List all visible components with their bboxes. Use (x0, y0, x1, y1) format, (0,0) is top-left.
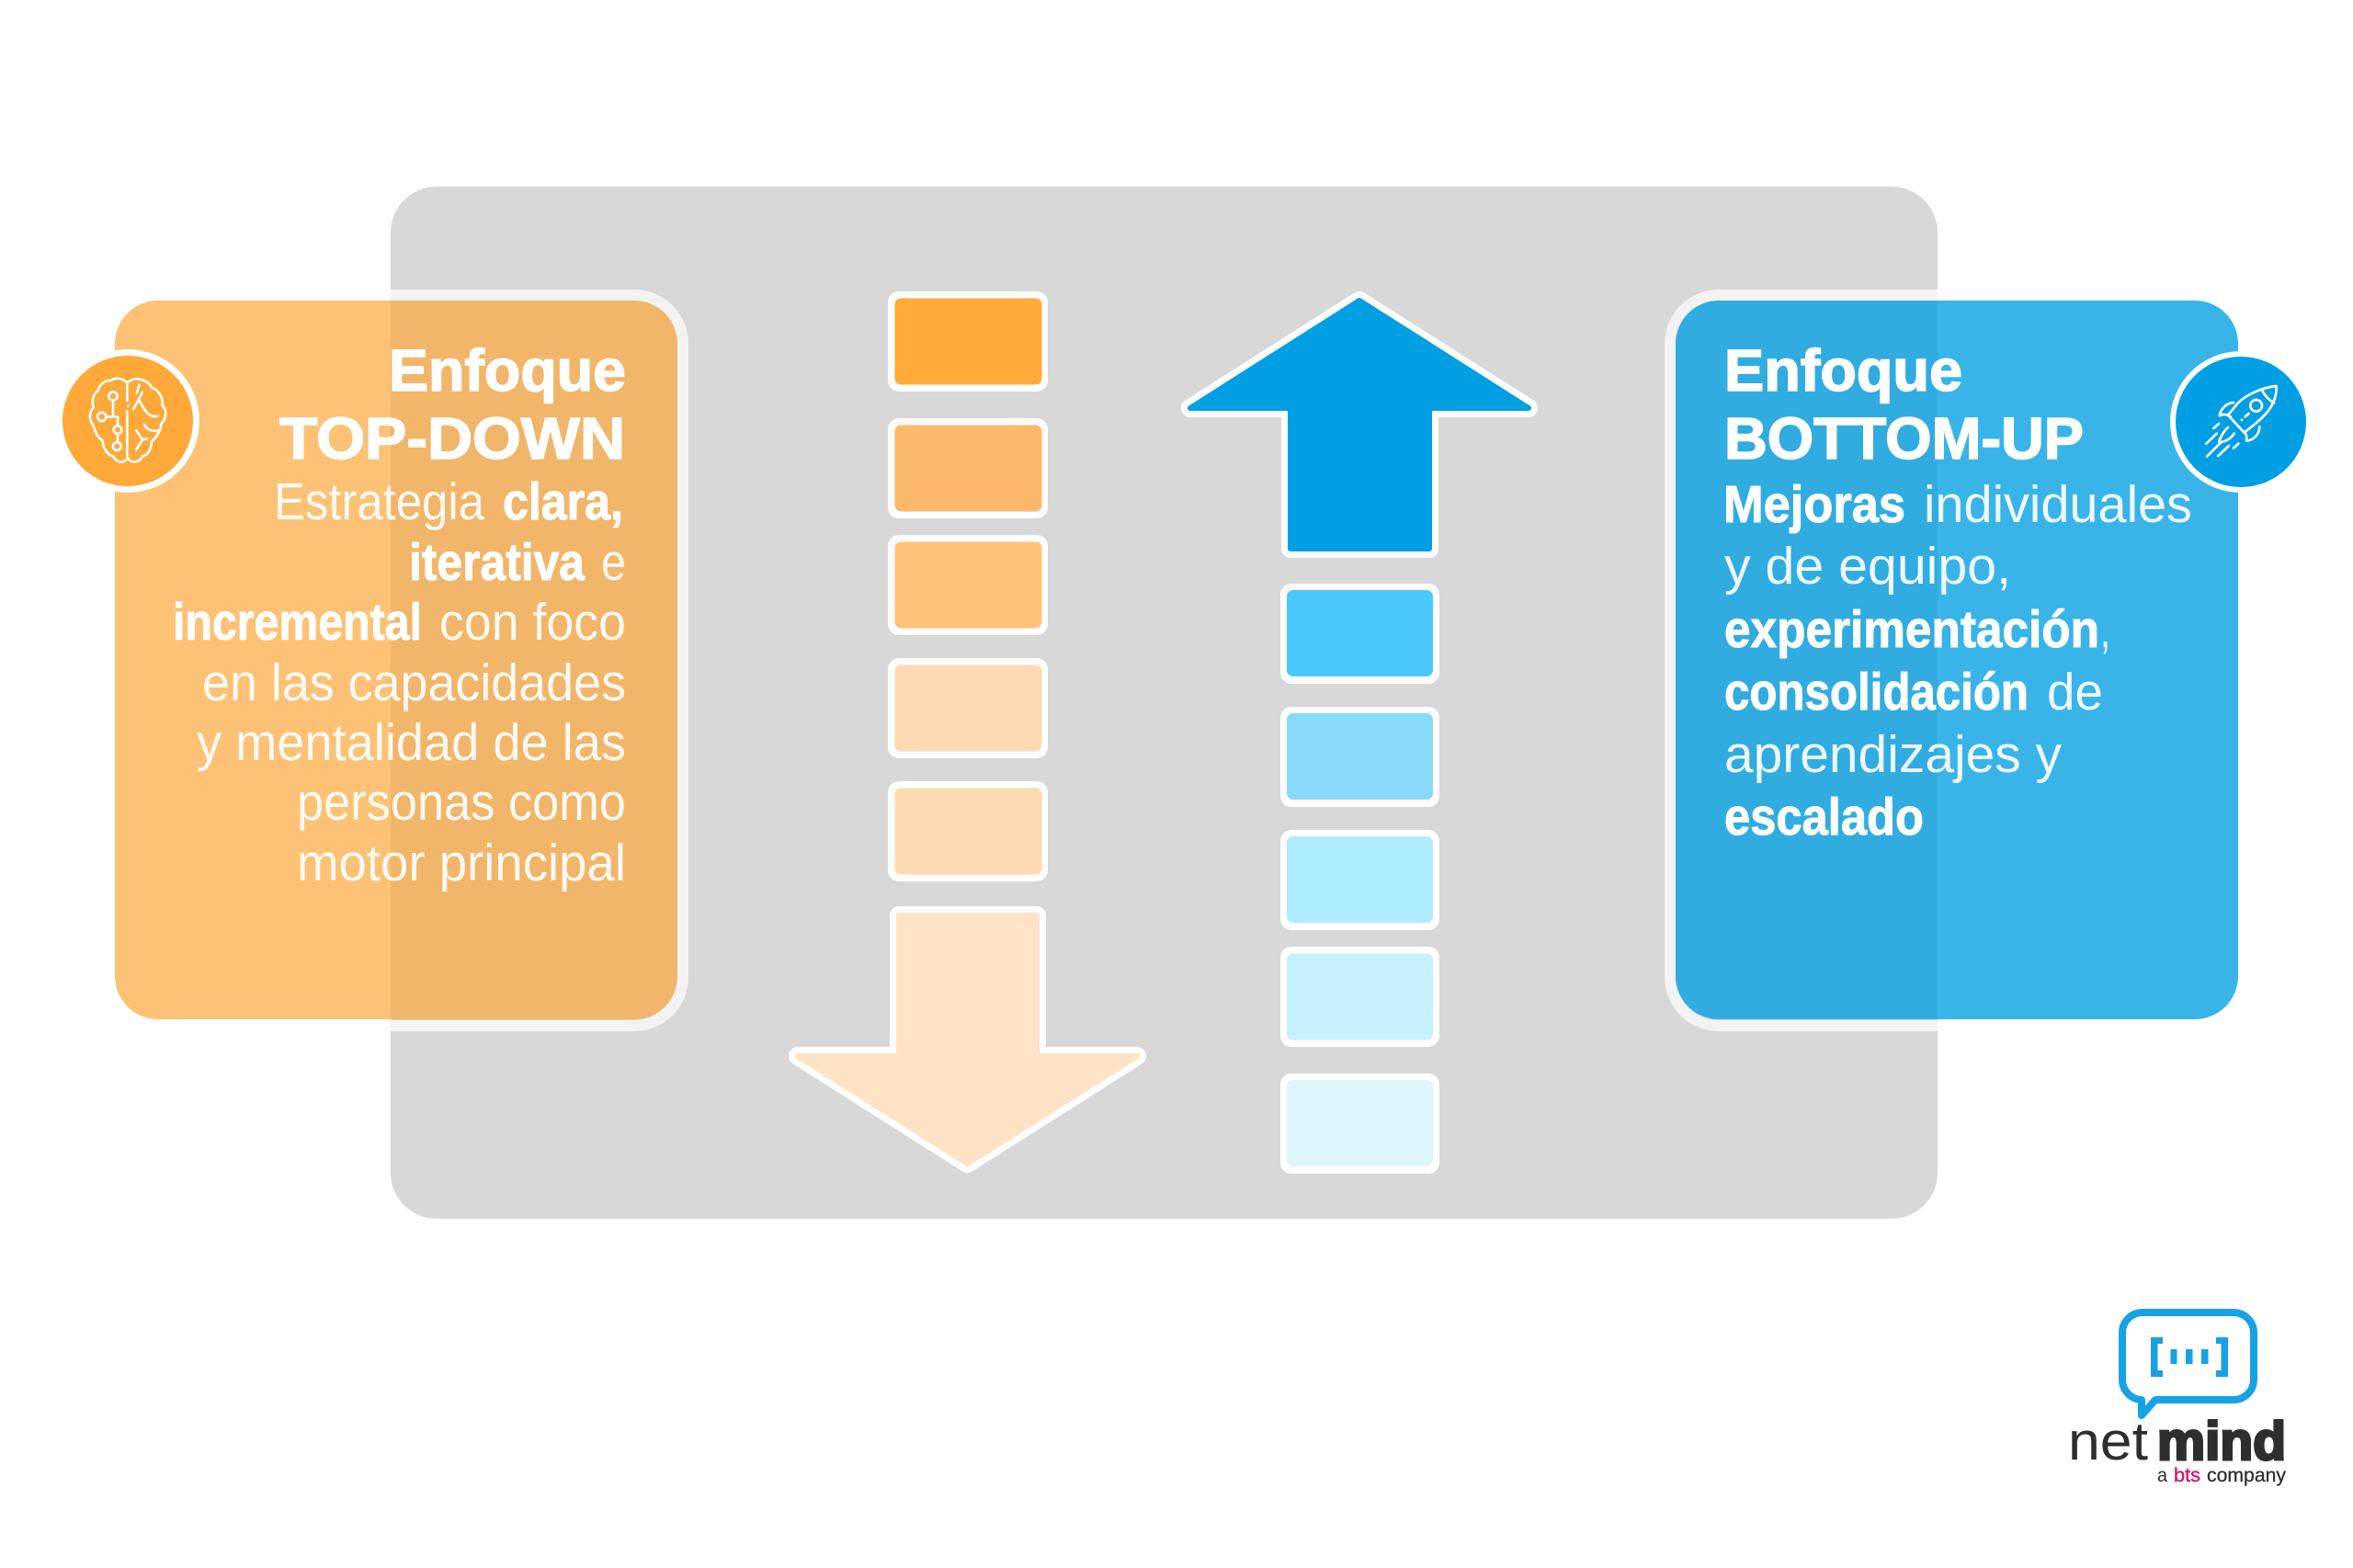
block: orange 1 (888, 291, 1048, 392)
text block: top-down description: en las capacidades (202, 653, 626, 712)
text block: top-down description: con foco (439, 593, 626, 652)
text block: bottom-up description: consolidación (1724, 663, 2029, 722)
block: blue 3 (1280, 830, 1439, 930)
heading: Enfoque BOTTOM-UP: BOTTOM-UP (1724, 405, 2084, 472)
text block: bottom-up description: aprendizajes y (1724, 725, 2062, 784)
wordmark: mind (2157, 1412, 2286, 1471)
text block: top-down description: Estrategia (274, 472, 484, 531)
heading: Enfoque BOTTOM-UP (1724, 337, 2084, 472)
heading: Enfoque TOP-DOWN: Enfoque (389, 337, 626, 403)
tagline: a (2157, 1465, 2167, 1486)
heading: Enfoque TOP-DOWN (279, 337, 626, 472)
text block: bottom-up description: individuales (1924, 475, 2192, 534)
icon: rocket in blue circle (2170, 351, 2312, 493)
block: blue 4 (1280, 947, 1439, 1047)
text block: top-down description: incremental (173, 593, 422, 652)
text block: top-down description: motor principal (297, 834, 626, 892)
tagline: company (2207, 1465, 2286, 1486)
text block: top-down description (173, 472, 626, 892)
block: blue 5 (1280, 1074, 1439, 1174)
panel: bottom-up card (1670, 295, 2244, 1026)
text block: top-down description: clara, (503, 472, 623, 531)
wordmark: net (2068, 1412, 2148, 1471)
block: orange 2 (888, 418, 1048, 518)
text block: top-down description: y mentalidad de las (197, 713, 626, 772)
text block: bottom-up description: y de equipo, (1724, 537, 2011, 596)
panel: grey background (391, 187, 1938, 1219)
block: blue 2 (1280, 707, 1439, 807)
text block: bottom-up description: escalado (1724, 788, 1924, 846)
text block: top-down description: e (601, 533, 626, 592)
tagline (2157, 1465, 2286, 1486)
text block: bottom-up description: experimentación (1724, 600, 2099, 659)
block: orange 4 (888, 658, 1048, 758)
icon: brain in orange circle (56, 349, 199, 493)
logo: netmind (2068, 1312, 2286, 1486)
text block: bottom-up description (1723, 475, 2192, 846)
text block: bottom-up description: Mejoras (1723, 475, 1905, 534)
text block: top-down description: personas como (297, 773, 626, 832)
block: blue 1 (1280, 584, 1439, 684)
block: orange 5 (888, 781, 1048, 881)
arrow: down (798, 915, 1137, 1164)
arrow: up (1190, 301, 1529, 549)
panel: top-down card (109, 295, 683, 1026)
icon: speech bubble (2122, 1312, 2254, 1415)
text block: bottom-up description: , (2100, 600, 2110, 659)
tagline: bts (2174, 1465, 2200, 1486)
text block: top-down description: iterativa (409, 533, 585, 592)
heading: Enfoque BOTTOM-UP: Enfoque (1724, 337, 1962, 403)
text block: bottom-up description: de (2047, 663, 2103, 722)
wordmark (2068, 1412, 2286, 1471)
block: orange 3 (888, 535, 1048, 635)
heading: Enfoque TOP-DOWN: TOP-DOWN (279, 405, 625, 472)
